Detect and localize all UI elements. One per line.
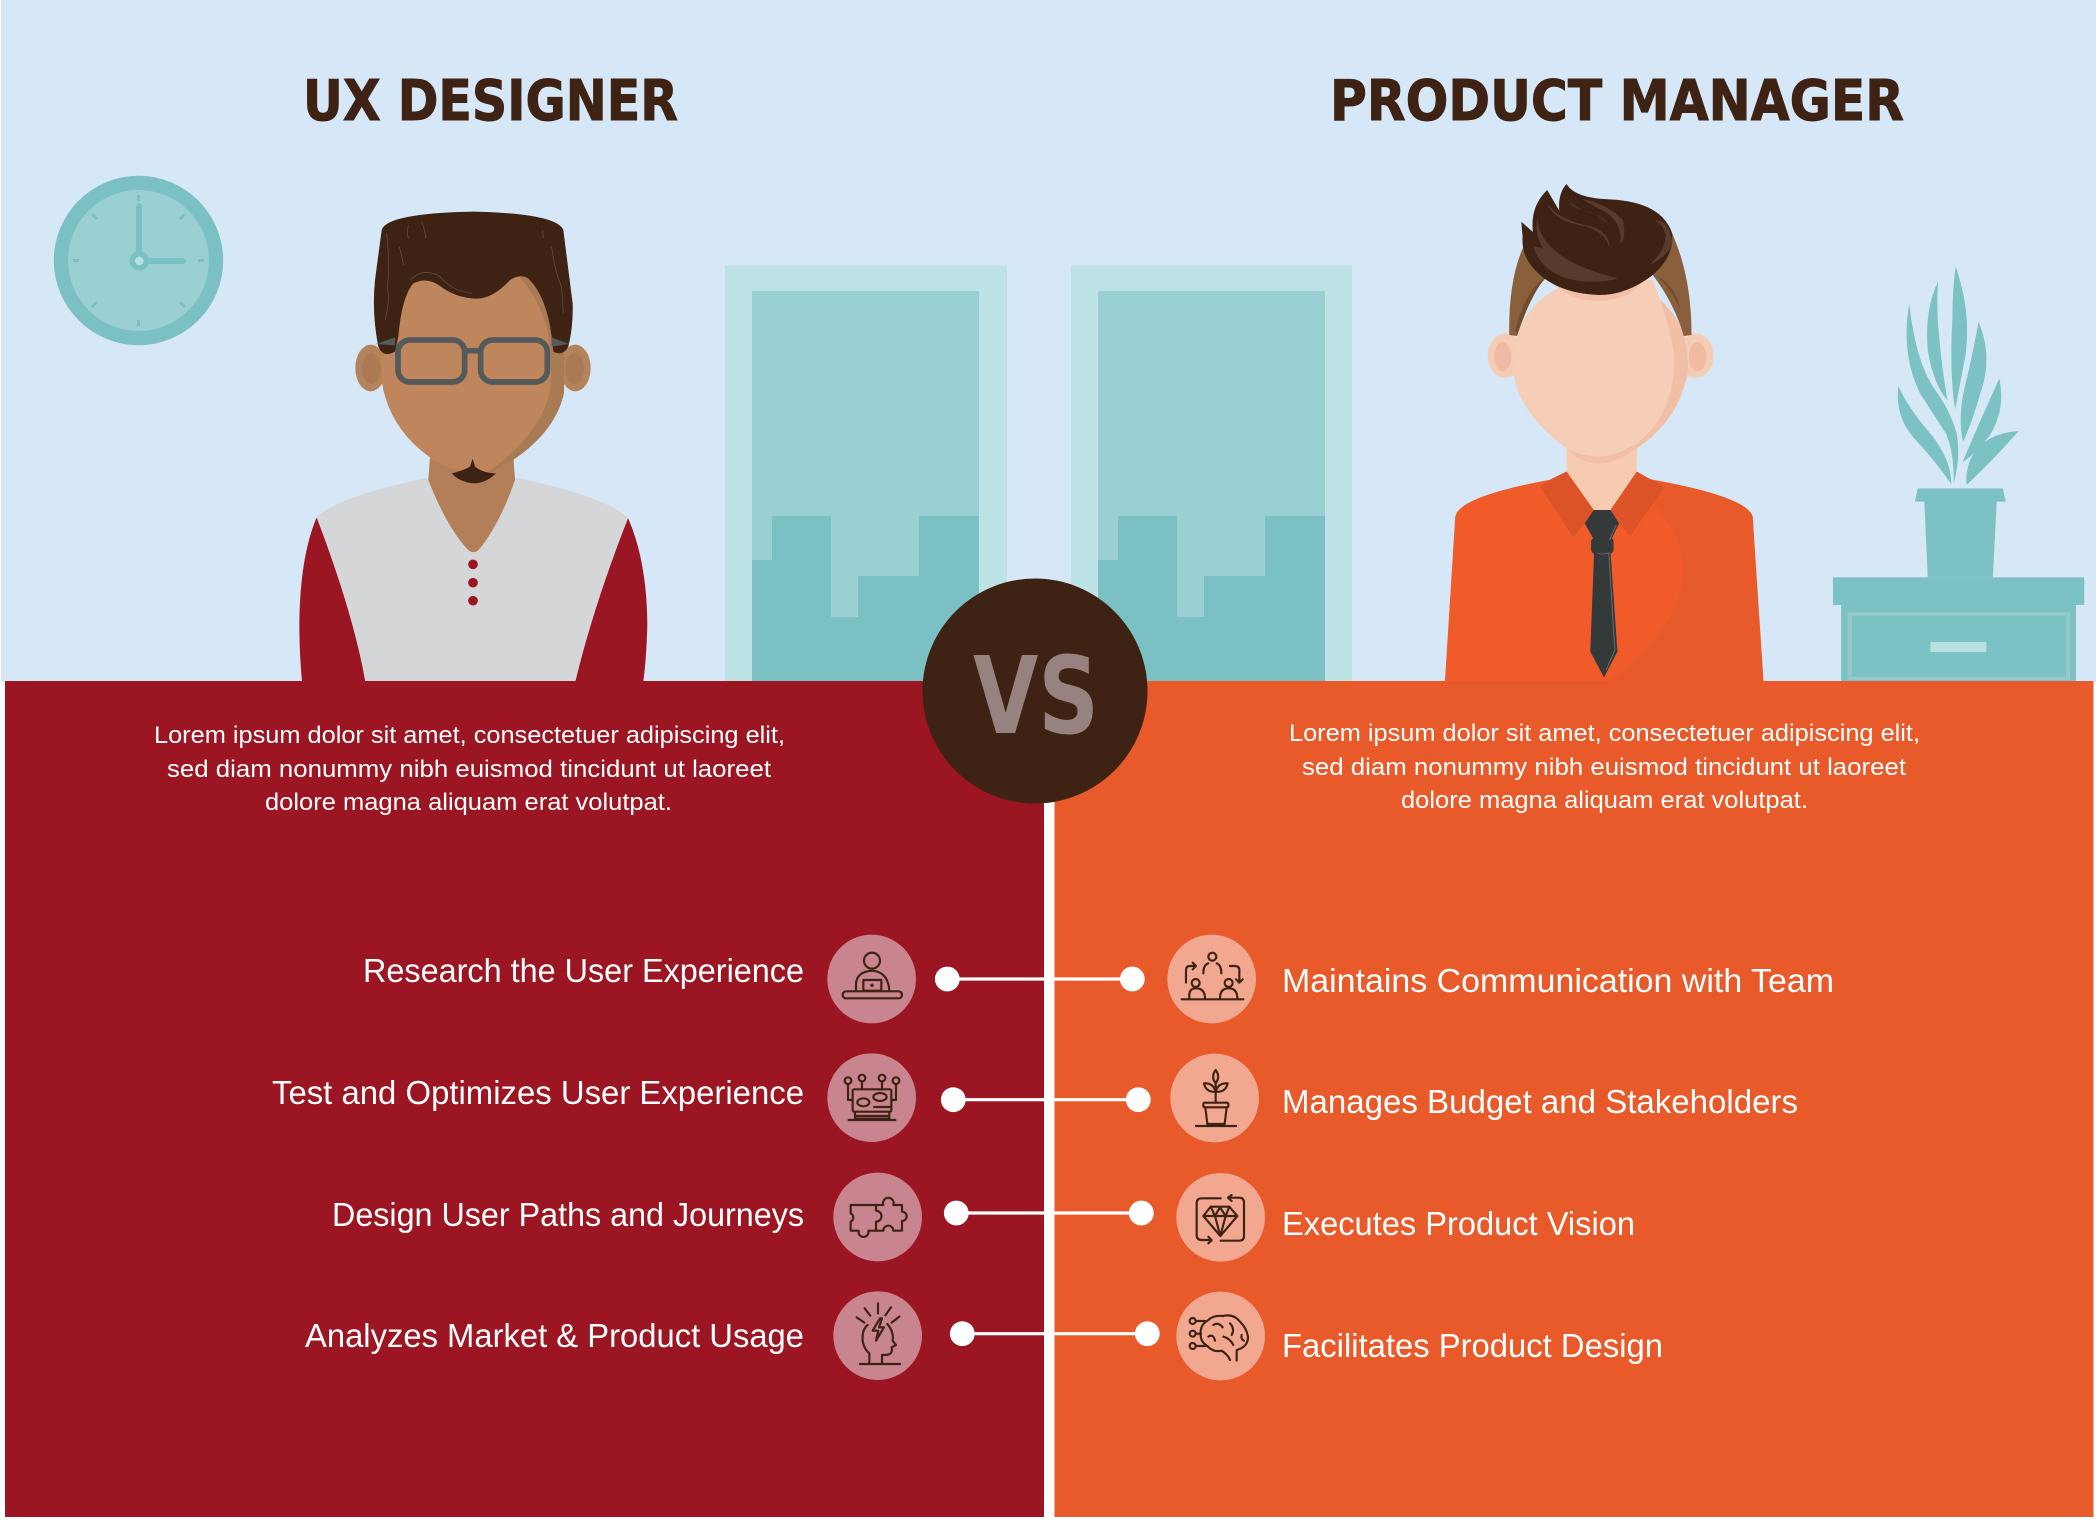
tie blade	[1590, 552, 1617, 677]
tie highlights	[1598, 525, 1616, 670]
goatee	[452, 459, 496, 483]
icon: puzzle pieces	[833, 1173, 922, 1261]
ears	[1488, 333, 1714, 378]
side hair	[1509, 233, 1692, 336]
ears	[355, 345, 591, 391]
description: UX designer: dolore magna aliquam erat volutpat.	[265, 789, 672, 816]
face shadow	[1513, 280, 1688, 463]
window: right	[1071, 266, 1352, 682]
hair highlights	[1533, 195, 1672, 282]
sleeves	[299, 517, 647, 681]
hair strands	[385, 222, 563, 320]
badge: VS: VS	[973, 635, 1099, 759]
list item text: facilitates: Facilitates Product Design	[1282, 1327, 1663, 1364]
icon: diamond with cycle arrows	[1176, 1173, 1265, 1262]
description: UX designer	[154, 722, 785, 816]
collar	[1540, 472, 1664, 537]
cabinet top	[1833, 577, 2084, 605]
description: UX designer: Lorem ipsum dolor sit amet, consectetuer adipiscing elit,	[154, 722, 785, 749]
side hair shade	[1516, 275, 1680, 336]
icon: brain with nodes	[1176, 1292, 1265, 1380]
cabinet body	[1841, 605, 2076, 682]
neck	[428, 457, 515, 552]
list item text: analyzes: Analyzes Market & Product Usage	[305, 1317, 804, 1354]
shirt	[317, 478, 628, 681]
panel: UX designer	[5, 681, 1044, 1517]
shirt buttons	[468, 559, 478, 605]
description: product manager: Lorem ipsum dolor sit amet, consectetuer adipiscing elit,	[1289, 720, 1920, 747]
illustration: product manager character	[1445, 184, 1764, 681]
illustration: cabinet with plant	[1833, 267, 2084, 682]
badge: VS	[922, 578, 1148, 804]
list item text: budget: Manages Budget and Stakeholders	[1282, 1083, 1798, 1120]
face	[1513, 280, 1674, 457]
connectors: lines and dots	[935, 967, 1160, 1346]
icon: circuit screen with chat	[827, 1053, 916, 1142]
list item text: vision: Executes Product Vision	[1282, 1205, 1635, 1242]
description: UX designer: sed diam nonummy nibh euismod tincidunt ut laoreet	[167, 756, 771, 783]
top hair	[1521, 184, 1672, 295]
icon: wall clock	[54, 176, 223, 345]
icon: head with lightning bolt	[833, 1291, 922, 1380]
description: product manager: dolore magna aliquam erat volutpat.	[1401, 787, 1808, 814]
icon badges	[827, 935, 1265, 1380]
forehead shadow	[1547, 277, 1640, 301]
neck	[1567, 443, 1637, 510]
list item text: research: Research the User Experience	[363, 952, 804, 989]
hair	[374, 212, 573, 354]
face	[382, 247, 551, 473]
background: sky wall	[1, 0, 2096, 682]
description: product manager	[1289, 720, 1920, 814]
drawer handle	[1930, 642, 1986, 652]
tie knot lower	[1591, 537, 1614, 554]
panel: product manager	[1054, 681, 2094, 1517]
illustration: UX designer character	[299, 212, 647, 681]
shirt highlight	[1445, 472, 1683, 681]
face shadow	[382, 247, 564, 474]
icon: potted plant	[1170, 1054, 1259, 1142]
list item text: design: Design User Paths and Journeys	[332, 1196, 804, 1233]
shirt	[1445, 472, 1764, 681]
description: product manager: sed diam nonummy nibh euismod tincidunt ut laoreet	[1302, 754, 1906, 781]
list item text: test: Test and Optimizes User Experience	[272, 1074, 804, 1111]
plant leaves	[1898, 267, 2019, 485]
tie knot	[1585, 510, 1619, 538]
glasses arms	[376, 337, 569, 347]
title: UX Designer: UX DESIGNER	[303, 69, 678, 134]
title: Product Manager: PRODUCT MANAGER	[1330, 69, 1904, 134]
icon: person at laptop	[827, 935, 916, 1023]
glasses	[398, 340, 547, 382]
list item text: communication: Maintains Communication with Team	[1282, 962, 1834, 999]
window: left	[725, 266, 1007, 682]
icon: team communication	[1167, 935, 1256, 1023]
plant pot	[1915, 488, 2006, 577]
drawer	[1850, 614, 2068, 678]
